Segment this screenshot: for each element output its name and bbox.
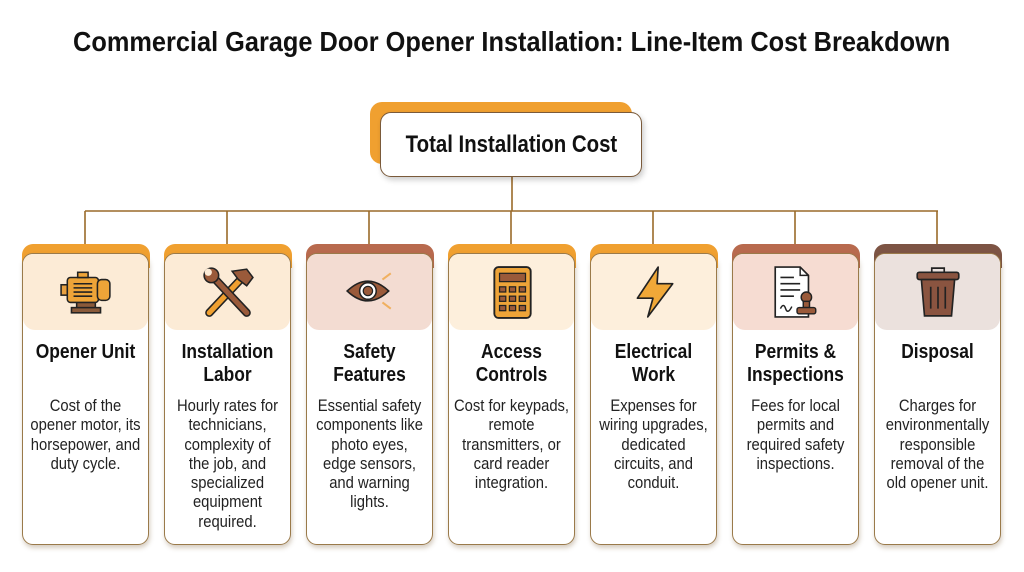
- card: safety features: Safety: [343, 341, 396, 363]
- card: installation labor: Installation: [182, 341, 273, 363]
- card: safety features: lights.: [350, 492, 389, 511]
- icon: lightning bolt: [636, 266, 674, 318]
- card: safety features: components like: [316, 415, 423, 434]
- card: access controls: [446, 244, 578, 550]
- icon: keypad: [493, 266, 532, 319]
- card: permits and inspections: Inspections: [747, 364, 844, 386]
- card: electrical work: wiring upgrades,: [599, 415, 708, 434]
- card: permits and inspections: [730, 244, 862, 550]
- card: installation labor: required.: [198, 512, 257, 531]
- title: Commercial Garage Door Opener Installation: Line-Item Cost Breakdown: [73, 26, 951, 57]
- connector lines: [84, 177, 938, 244]
- card: access controls: Controls: [476, 364, 547, 386]
- card: access controls: Access: [481, 341, 542, 363]
- card: installation labor: [162, 244, 294, 550]
- card: opener unit: Cost of the: [50, 396, 121, 415]
- card: disposal: [872, 244, 1004, 550]
- card: disposal: old opener unit.: [887, 473, 988, 492]
- card: electrical work: Work: [632, 364, 675, 386]
- icon: document with stamp: [774, 266, 816, 318]
- card: access controls: transmitters, or: [462, 435, 561, 454]
- card: access controls: remote: [488, 415, 535, 434]
- card: electrical work: circuits, and: [614, 454, 693, 473]
- card: access controls: integration.: [475, 473, 548, 492]
- card: safety features: photo eyes,: [331, 435, 408, 454]
- card: opener unit: Opener Unit: [36, 341, 135, 363]
- root box: total installation cost: Total Installation Cost: [405, 131, 617, 158]
- icon: eye sensor: [346, 272, 392, 310]
- card: installation labor: technicians,: [188, 415, 267, 434]
- card: electrical work: dedicated: [621, 435, 686, 454]
- card: opener unit: horsepower, and: [31, 435, 140, 454]
- card: safety features: [304, 244, 436, 550]
- card: opener unit: duty cycle.: [51, 454, 120, 473]
- card: permits and inspections: required safety: [747, 435, 844, 454]
- card: electrical work: conduit.: [628, 473, 679, 492]
- card: safety features: Features: [333, 364, 406, 386]
- card: installation labor: equipment: [193, 492, 262, 511]
- card: disposal: environmentally: [886, 415, 989, 434]
- card: installation labor: Hourly rates for: [177, 396, 278, 415]
- icon: trash can: [916, 267, 960, 317]
- card: safety features: Essential safety: [318, 396, 421, 415]
- card: disposal: Charges for: [899, 396, 976, 415]
- icon: wrench and hammer: [203, 267, 254, 317]
- card: disposal: responsible: [900, 435, 975, 454]
- card: access controls: card reader: [474, 454, 549, 473]
- card: installation labor: the job, and: [189, 454, 266, 473]
- card: electrical work: [588, 244, 720, 550]
- card: permits and inspections: Fees for local: [751, 396, 840, 415]
- card: permits and inspections: inspections.: [756, 454, 835, 473]
- card: permits and inspections: Permits &: [755, 341, 836, 363]
- card: safety features: edge sensors,: [323, 454, 416, 473]
- card: electrical work: Electrical: [615, 341, 692, 363]
- card: electrical work: Expenses for: [610, 396, 697, 415]
- card: installation labor: Labor: [203, 364, 252, 386]
- card: installation labor: specialized: [191, 473, 264, 492]
- card: access controls: Cost for keypads,: [454, 396, 569, 415]
- card: opener unit: [20, 244, 152, 550]
- card: disposal: removal of the: [891, 454, 984, 473]
- card: disposal: Disposal: [901, 341, 974, 363]
- card: safety features: and warning: [329, 473, 410, 492]
- root box: total installation cost: [370, 102, 646, 182]
- icon: motor: [60, 272, 111, 314]
- card: opener unit: opener motor, its: [30, 415, 141, 434]
- card: installation labor: complexity of: [184, 435, 271, 454]
- card: permits and inspections: permits and: [757, 415, 834, 434]
